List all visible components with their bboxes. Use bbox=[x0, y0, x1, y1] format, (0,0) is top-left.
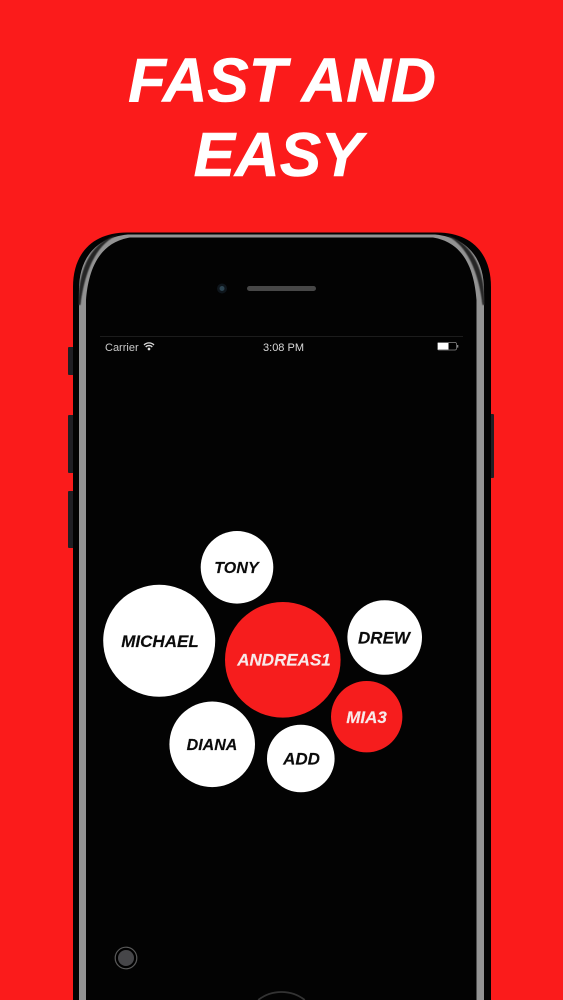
speaker bbox=[247, 286, 316, 291]
bubble: Mia3: MIA3 bbox=[346, 708, 387, 727]
bubble: Michael: MICHAEL bbox=[121, 632, 199, 651]
bubble: Mia3 bbox=[331, 681, 402, 752]
bubble: Add bbox=[267, 725, 335, 792]
bubble: Diana: DIANA bbox=[187, 737, 237, 754]
bubble: Drew bbox=[347, 600, 422, 675]
phone side buttons bbox=[68, 347, 494, 548]
home button bbox=[258, 992, 305, 1000]
time: 3:08 PM bbox=[263, 342, 304, 354]
title bbox=[128, 46, 436, 190]
bubble: Add: ADD bbox=[282, 750, 320, 768]
bubble: Andreas1: ANDREAS1 bbox=[236, 650, 331, 670]
title: EASY bbox=[194, 121, 368, 190]
icon: wifi bbox=[144, 343, 154, 350]
title: FAST AND bbox=[128, 46, 436, 116]
phone body bbox=[73, 232, 491, 1000]
bubble: Andreas1 bbox=[225, 602, 341, 718]
bubble: Tony bbox=[201, 531, 273, 604]
bubble: Tony: TONY bbox=[214, 560, 260, 577]
icon: battery bbox=[438, 342, 458, 350]
bubble: Diana bbox=[169, 702, 255, 787]
bubble: Michael bbox=[103, 585, 215, 697]
floating button bbox=[115, 947, 137, 969]
carrier label: Carrier bbox=[105, 342, 139, 354]
bubble: Drew: DREW bbox=[358, 628, 412, 648]
status bar bbox=[100, 336, 463, 354]
front camera bbox=[217, 284, 227, 294]
